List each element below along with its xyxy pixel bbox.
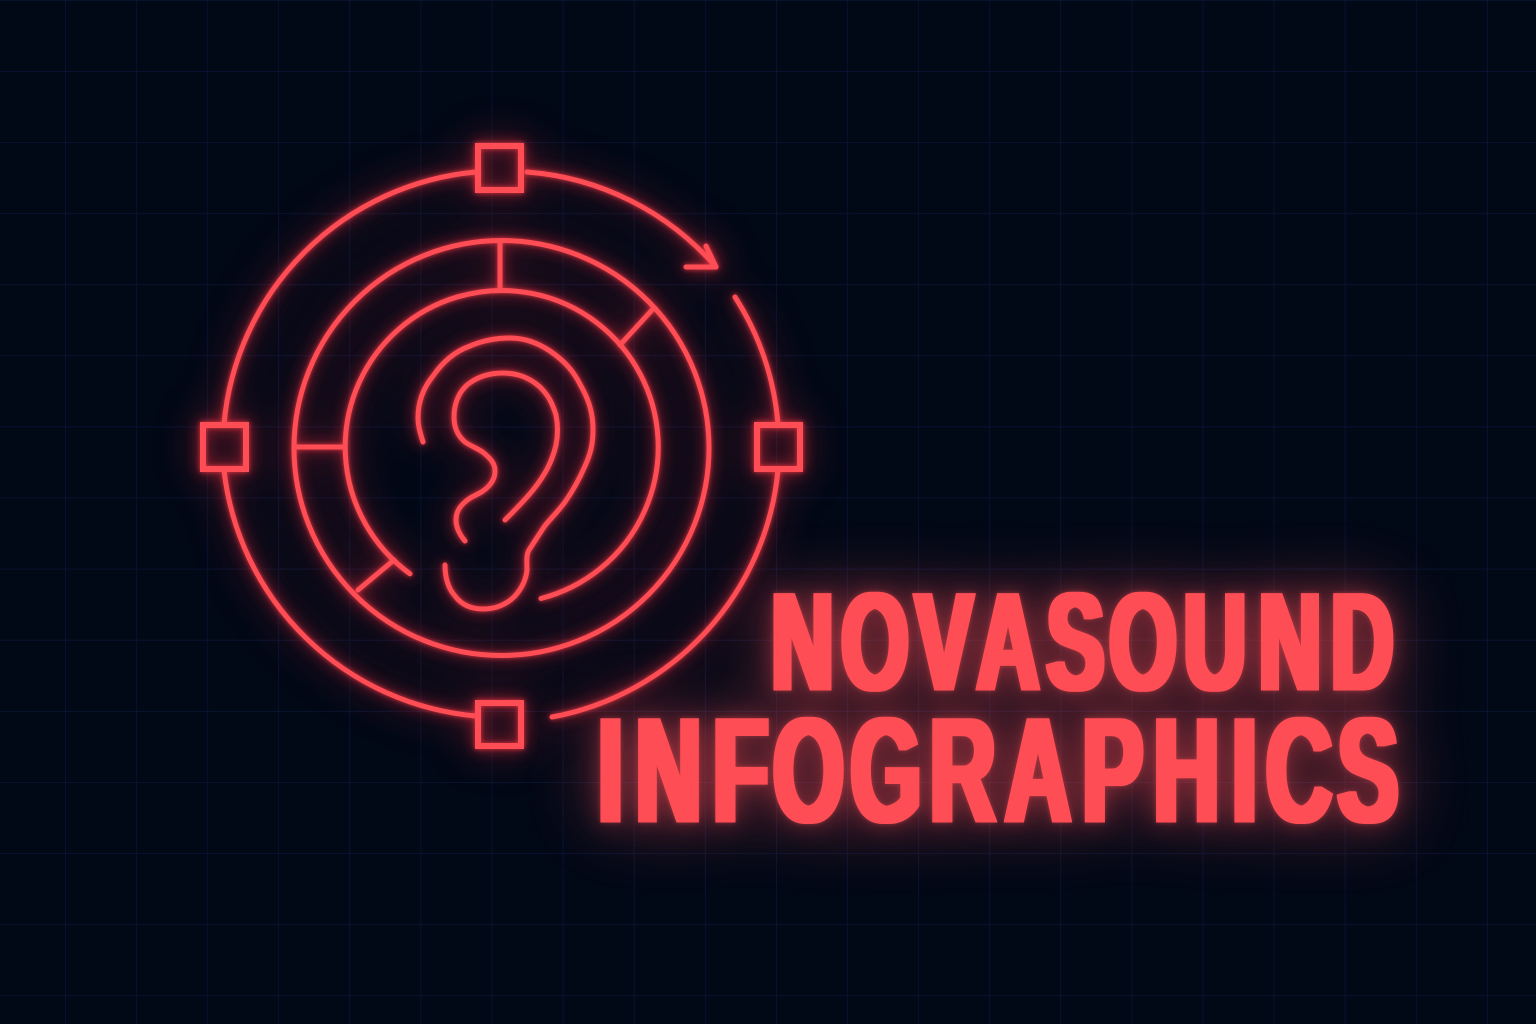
title line 1: NOVASOUND	[771, 564, 1394, 720]
outer ring with arrow	[224, 172, 778, 717]
logo: ear target emblem	[203, 146, 800, 746]
title: NovaSound Infographics	[598, 564, 1399, 855]
ring spokes	[297, 241, 652, 590]
title line 2: INFOGRAPHICS	[598, 688, 1399, 855]
ear outer helix	[418, 338, 593, 609]
ear inner curve	[454, 373, 558, 541]
middle ring	[294, 240, 709, 656]
node squares	[203, 146, 800, 746]
inner ring arc	[345, 291, 658, 598]
